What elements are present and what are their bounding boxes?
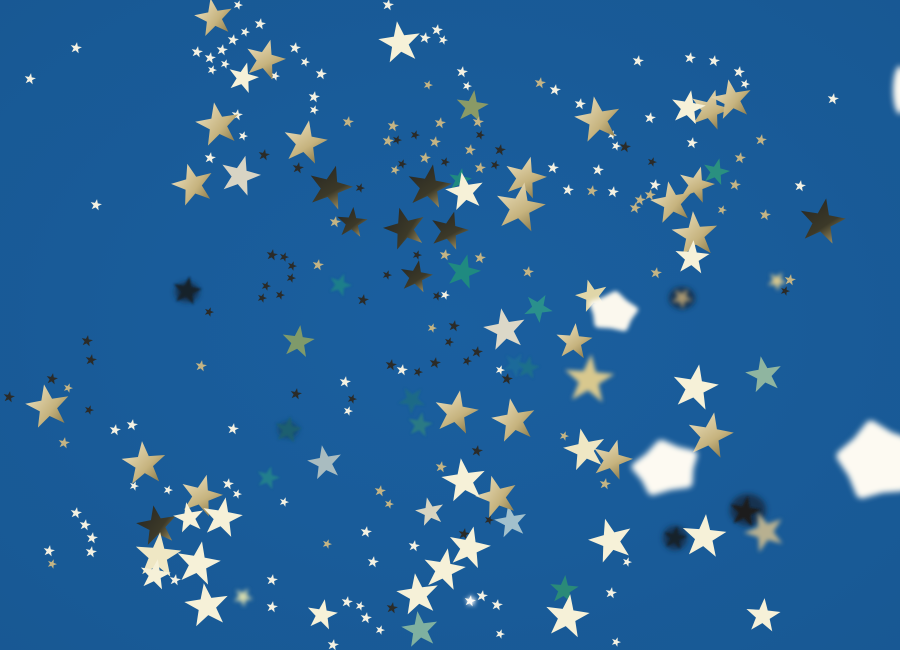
blurred dark shadows [175,282,766,550]
small dark stars [3,129,791,614]
large dark gold stars [134,160,849,546]
large gold stars [22,0,755,520]
small gold stars [46,76,797,569]
teal and green stars [280,88,784,648]
blurred teal and dark stars [171,270,763,550]
large cream stars [134,18,782,638]
out of focus stars [231,268,790,609]
large blurred white blobs [634,66,900,494]
